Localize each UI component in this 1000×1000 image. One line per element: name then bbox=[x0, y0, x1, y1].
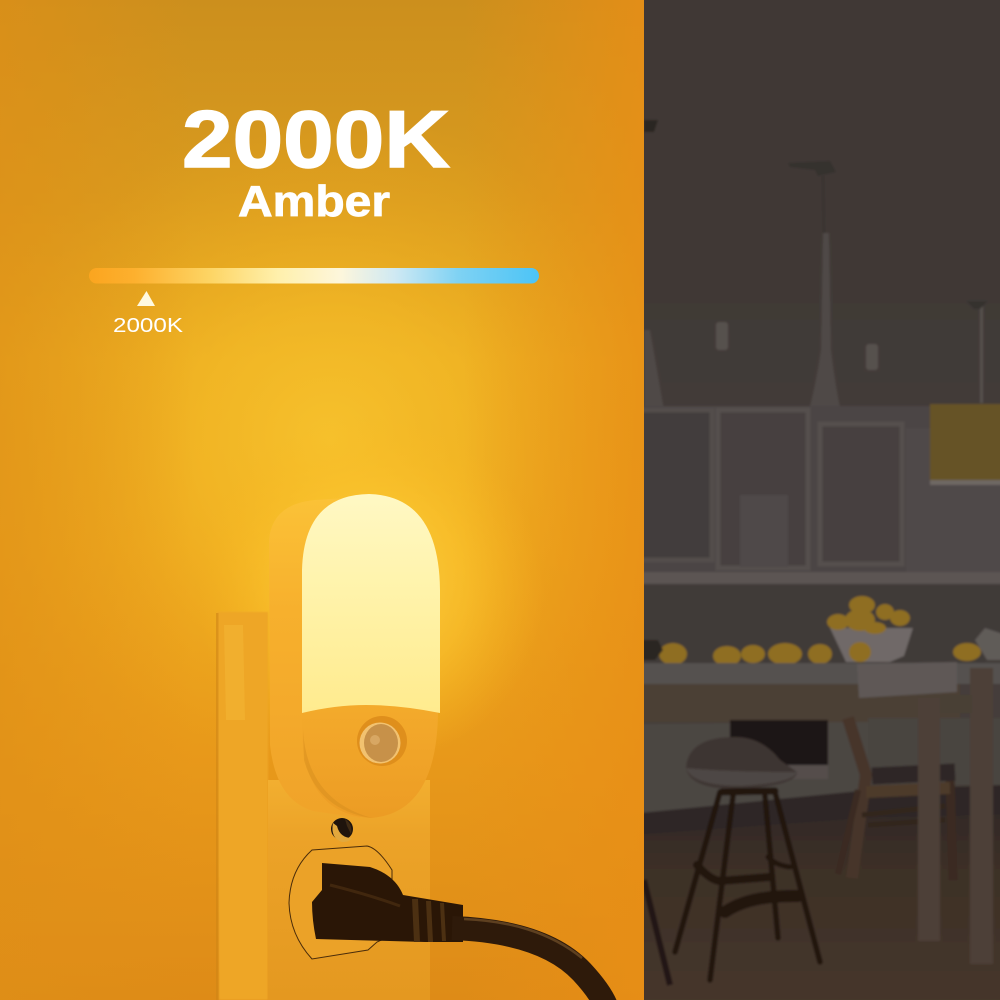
colour temperature scale bar bbox=[89, 268, 539, 284]
subtitle: colour name: Amber bbox=[238, 177, 390, 226]
scale marker triangle bbox=[137, 291, 155, 306]
panel: amber lit wall bbox=[0, 0, 644, 1000]
track spots bbox=[716, 301, 988, 403]
lower cabinets and oven bbox=[640, 718, 1000, 835]
bar stool bbox=[675, 737, 820, 980]
counter and table apron bbox=[644, 662, 1000, 684]
upper cabinets bbox=[640, 406, 1000, 584]
table legs bbox=[918, 668, 993, 964]
second stool leg bbox=[644, 880, 670, 985]
motion sensor bbox=[357, 716, 407, 766]
outlet socket outline bbox=[289, 846, 392, 959]
pendant lamp left bbox=[644, 120, 664, 410]
panel: dimmed kitchen photo bbox=[644, 120, 1000, 1000]
scale marker label: 2000K bbox=[113, 315, 184, 337]
backsplash bbox=[640, 584, 1000, 666]
wall outlet plate bbox=[216, 612, 430, 1000]
plug and power cord bbox=[312, 863, 606, 1000]
table towel bbox=[857, 662, 957, 698]
light lens bbox=[302, 494, 440, 713]
pendant lamp white bbox=[790, 162, 840, 406]
fruit and bowl on counter bbox=[640, 596, 1000, 666]
dining chair bbox=[838, 718, 955, 880]
title: colour temperature: 2000K bbox=[182, 95, 450, 185]
floor bbox=[640, 815, 1000, 1000]
night light housing bbox=[269, 494, 440, 818]
outlet screw bbox=[331, 818, 353, 842]
amber drum shade bbox=[930, 404, 1000, 485]
